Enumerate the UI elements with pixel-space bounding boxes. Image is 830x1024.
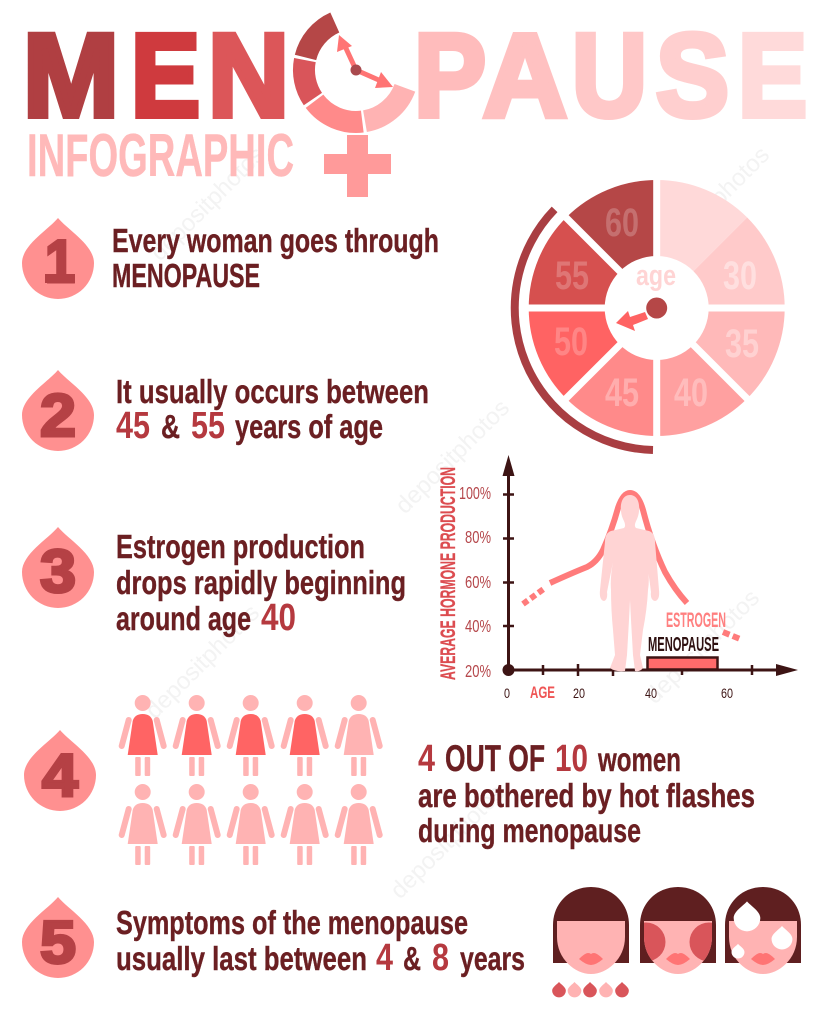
axis labels: 20%: [465, 661, 491, 681]
text: step 2: years of age: [235, 408, 383, 445]
subtitle: INFOGRAPHIC: INFOGRAPHIC: [27, 122, 294, 189]
icon: number drop 3: 3: [40, 538, 76, 605]
icon: female symbol clock: [304, 22, 405, 197]
text: step 4: OUT OF: [445, 738, 545, 779]
text: step 5: usually last between: [116, 940, 367, 977]
menopause range bar: MENOPAUSE: [648, 634, 719, 656]
icon: face with sweat: [725, 887, 801, 974]
text: step 5: Symptoms of the menopause: [116, 904, 468, 941]
text: step 1: [112, 222, 439, 294]
axis labels: 40%: [465, 616, 491, 636]
title: MENOPAUSE: E: [131, 10, 200, 142]
title: MENOPAUSE: U: [572, 10, 647, 142]
watermark: depositphotos: [650, 141, 775, 266]
watermark: depositphotos: [390, 394, 515, 519]
icon: number drop 4: [24, 730, 96, 811]
text: step 2: [116, 373, 429, 447]
hormone chart: [437, 455, 798, 702]
step 2: [22, 370, 429, 451]
text: step 2: It usually occurs between: [116, 373, 429, 410]
title: MENOPAUSE: S: [656, 10, 729, 142]
watermark: depositphotos: [385, 779, 510, 904]
icon: face with hot flush: [640, 887, 716, 974]
text: step 3: 40: [261, 597, 296, 639]
text: step 3: around age: [116, 600, 251, 637]
axis labels: [437, 467, 733, 702]
title: MENOPAUSE: [23, 10, 807, 142]
age wheel chart: 30: [723, 254, 757, 298]
age wheel chart: 55: [555, 254, 589, 298]
age wheel chart: age: [636, 260, 676, 292]
age wheel chart: 40: [674, 371, 708, 415]
step 3: [22, 527, 406, 639]
icon: number drop 5: [22, 897, 94, 978]
axis labels: 40: [645, 685, 657, 701]
text: step 5: years: [460, 940, 525, 977]
estrogen curve: [523, 493, 740, 639]
age wheel chart: 45: [605, 371, 639, 415]
text: step 3: Estrogen production: [116, 528, 365, 565]
icon: number drop 2: 2: [40, 382, 76, 449]
menopause range bar: [648, 634, 719, 670]
text: step 4: 10: [555, 738, 588, 780]
axis labels: AVERAGE HORMONE PRODUCTION: [437, 467, 460, 680]
age wheel chart: 60: [605, 201, 639, 245]
text: step 3: [116, 528, 406, 639]
axis labels: 80%: [465, 527, 491, 547]
text: step 4: 4: [418, 738, 435, 780]
icon: face with period drops: [552, 887, 629, 997]
text: step 4: during menopause: [418, 812, 641, 849]
watermark: [140, 141, 775, 904]
text: step 4: [418, 738, 755, 849]
title: MENOPAUSE: A: [483, 10, 567, 142]
watermark: depositphotos: [640, 584, 765, 709]
text: step 1: Every woman goes through: [112, 222, 439, 259]
axis labels: 60%: [465, 572, 491, 592]
watermark: depositphotos: [145, 141, 270, 266]
text: step 2: 55: [191, 405, 225, 447]
text: step 5: &: [403, 940, 421, 977]
axis labels: 0: [504, 685, 510, 701]
axis labels: AGE: [530, 683, 555, 702]
woman silhouette: [600, 495, 659, 671]
watermark: depositphotos: [140, 599, 265, 724]
text: step 2: &: [161, 408, 180, 445]
step 1: [22, 218, 439, 299]
text: step 5: 8: [432, 937, 449, 979]
text: step 4: women: [597, 741, 681, 778]
text: step 3: drops rapidly beginning: [116, 564, 406, 601]
text: step 5: [116, 904, 525, 979]
text: step 2: 45: [116, 405, 150, 447]
estrogen label: ESTROGEN: [666, 609, 726, 632]
title: MENOPAUSE: N: [208, 10, 289, 142]
icon: number drop 3: [22, 527, 94, 608]
step 4: [24, 695, 755, 865]
icon: number drop 5: 5: [40, 909, 76, 976]
icon: number drop 1: 1: [45, 228, 75, 295]
axis labels: 60: [721, 685, 733, 701]
text: step 1: MENOPAUSE: [112, 257, 260, 294]
pictogram: 4 of 10 women: [122, 695, 380, 865]
chart axes: [502, 455, 798, 676]
title: MENOPAUSE: P: [414, 10, 486, 142]
age wheel chart: 50: [554, 320, 588, 364]
axis labels: 20: [573, 685, 585, 701]
axis labels: 100%: [459, 483, 491, 503]
icon: number drop 4: 4: [42, 742, 79, 809]
icon: number drop 1: [22, 218, 94, 299]
title: MENOPAUSE: E: [738, 10, 807, 142]
age wheel chart: [515, 175, 790, 450]
step 5: [22, 897, 525, 979]
text: step 5: 4: [376, 937, 393, 979]
title: MENOPAUSE: M: [23, 10, 119, 142]
age wheel chart: 35: [725, 322, 759, 366]
icon: number drop 2: [22, 370, 94, 451]
